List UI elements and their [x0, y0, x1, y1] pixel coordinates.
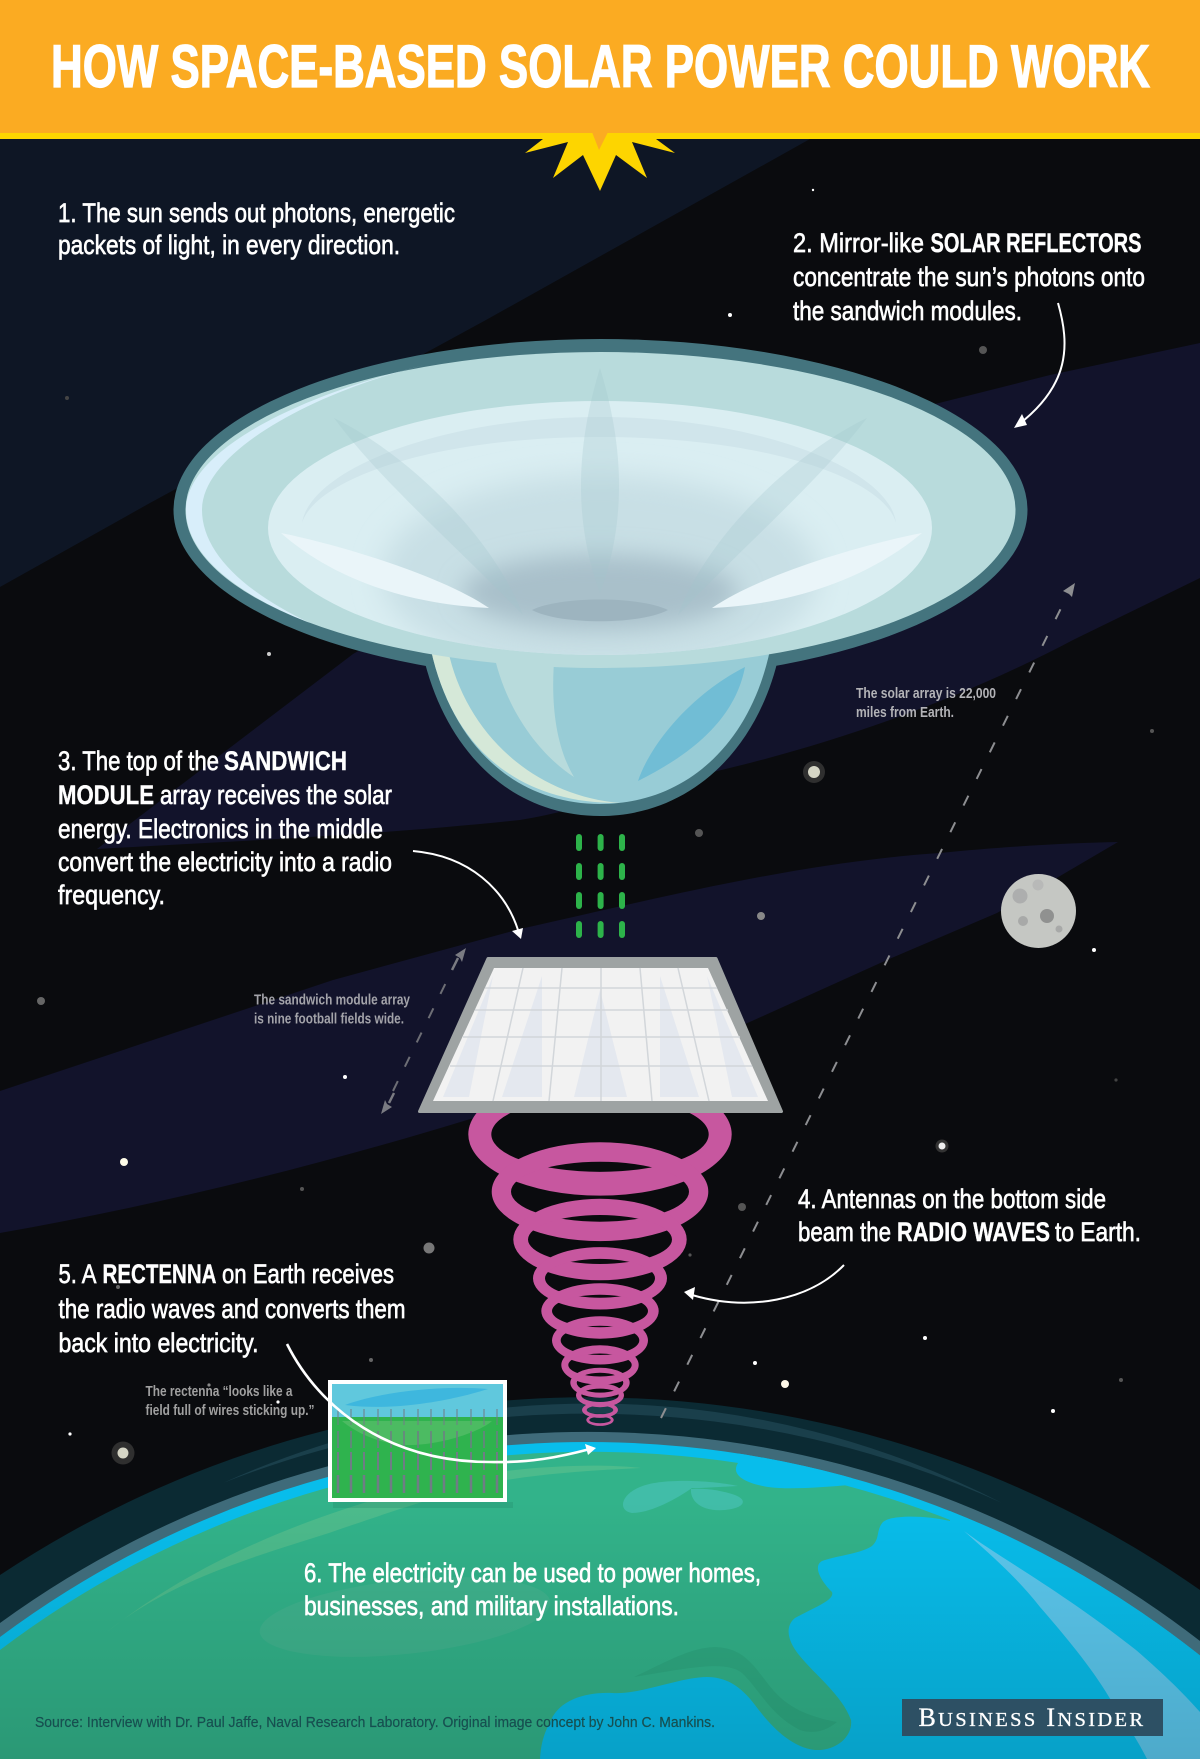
ocean: main body: [540, 1500, 1200, 1759]
land decal: long light streak: [107, 1466, 641, 1632]
step 5 text: on Earth receives: [222, 1259, 394, 1289]
sun: [525, 139, 675, 191]
step 5 text: the radio waves and converts them: [58, 1294, 406, 1324]
land: [0, 1452, 1200, 1759]
atmosphere highlight band: [223, 1403, 1002, 1503]
land decal: dark ridge: [634, 1647, 837, 1732]
ocean: light streak: [964, 1531, 1200, 1759]
rectenna shadow: [333, 1502, 513, 1508]
land decal: flower shape: [623, 1481, 743, 1513]
step 1 text: [58, 198, 455, 260]
note: sandwich module width: is nine football fields wide.: [254, 1010, 404, 1028]
step 5 text: back into electricity.: [58, 1328, 258, 1358]
step 5 text: RECTENNA: [102, 1259, 216, 1289]
dish rim: [174, 339, 1028, 681]
step 3 text: energy. Electronics in the middle: [58, 814, 383, 844]
module frame: [420, 958, 782, 1112]
step 4 text: [798, 1184, 1141, 1247]
step 3 text: SANDWICH: [224, 746, 347, 776]
orange banner: [0, 0, 1200, 133]
step 3 text: convert the electricity into a radio: [58, 847, 392, 877]
step 3 text: [58, 746, 392, 910]
rectenna inset: [328, 1380, 513, 1508]
land decal: soft blob: [256, 1565, 554, 1669]
dashed width arrow: nine football fields: [381, 948, 466, 1114]
note: solar array distance: [856, 685, 996, 721]
step 5 text: 5. A: [58, 1259, 96, 1289]
arrow: step 5: [287, 1344, 596, 1462]
dish light petals: [281, 533, 922, 608]
step 4 text: RADIO WAVES: [897, 1217, 1050, 1247]
sun notch: [592, 132, 608, 150]
step 2 text: [793, 228, 1145, 326]
background band: middle diagonal: [97, 343, 1200, 849]
step 3 text: frequency.: [58, 880, 165, 910]
source line: Source: Interview with Dr. Paul Jaffe, Naval Research Laboratory. Original image concept by John C. Mankins.: [35, 1714, 715, 1731]
arrow: step 4: [684, 1265, 844, 1303]
dish inner surface: [268, 401, 932, 655]
bulb blue fold: [638, 667, 745, 781]
module grid: [450, 968, 752, 1101]
Business Insider logo: BUSINESS INSIDER: [918, 1703, 1143, 1732]
rectenna sky: [332, 1384, 503, 1417]
step 5 text: [58, 1259, 406, 1358]
step 6 text: businesses, and military installations.: [304, 1591, 679, 1621]
background band: upper-left: [0, 139, 810, 587]
arrow: step 3: [413, 851, 523, 939]
microwave photon dashes: [576, 834, 625, 938]
dashed distance arrow: 22,000 miles: [661, 583, 1075, 1418]
rectenna field highlight: [342, 1421, 492, 1445]
note: rectenna quote: [146, 1383, 314, 1419]
note: solar array distance: miles from Earth.: [856, 704, 954, 721]
dish arc crescent: [302, 417, 896, 523]
rectenna wires: [338, 1409, 497, 1493]
atmosphere: [0, 1397, 1200, 1759]
module surface: [433, 968, 768, 1101]
moon: [1001, 874, 1076, 948]
stars: [37, 189, 1154, 1464]
solar reflector dish: [174, 339, 1028, 816]
note: solar array distance: The solar array is 22,000: [856, 685, 996, 702]
bulb interior: [431, 650, 770, 804]
earth bottom shading: [0, 1562, 1200, 1759]
dish interior: [186, 352, 1016, 668]
step 3 text: MODULE: [58, 780, 154, 810]
ocean ring: [0, 1442, 1200, 1759]
dish dark petals: [334, 368, 867, 615]
note: sandwich module width: [254, 992, 411, 1028]
dish centre aperture: [532, 600, 668, 621]
dish left highlight: [186, 365, 425, 623]
step 3 text: array receives the solar: [160, 780, 392, 810]
note: rectenna quote: The rectenna “looks like a: [146, 1383, 293, 1400]
step 1 text: 1. The sun sends out photons, energetic: [58, 198, 455, 228]
step 2 text: 2. Mirror-like: [793, 228, 924, 258]
step 6 text: 6. The electricity can be used to power homes,: [304, 1558, 761, 1588]
rectenna cloud: [345, 1388, 488, 1407]
step 6 text: [304, 1558, 761, 1621]
Business Insider logo: [902, 1699, 1163, 1736]
steel atmosphere ring: [0, 1432, 1200, 1759]
earth: [0, 1397, 1200, 1759]
bulb light fold: [493, 650, 574, 777]
ocean: northern bay: [736, 1454, 852, 1488]
yellow rule: [0, 133, 1200, 139]
module blue facets: [443, 976, 758, 1097]
step 4 text: 4. Antennas on the bottom side: [798, 1184, 1106, 1214]
background band: lower diagonal: [0, 842, 1118, 1233]
header banner: [0, 0, 1200, 191]
note: sandwich module width: The sandwich module array: [254, 992, 411, 1008]
sandwich module array: [420, 958, 782, 1112]
step 4 text: beam the: [798, 1217, 891, 1247]
step 1 text: packets of light, in every direction.: [58, 230, 400, 260]
bulb pale highlight: [431, 650, 620, 803]
rectenna field: [332, 1417, 503, 1498]
rectenna frame: [328, 1380, 507, 1502]
bulb rim: [423, 655, 779, 816]
step 4 text: to Earth.: [1055, 1217, 1141, 1247]
step 2 text: the sandwich modules.: [793, 296, 1022, 326]
dish depth shading: [384, 474, 816, 655]
step 3 text: 3. The top of the: [58, 746, 219, 776]
arrow: step 2: [1014, 303, 1065, 428]
note: rectenna quote: field full of wires sticking up.”: [146, 1402, 314, 1419]
radio wave coils: [468, 1073, 732, 1426]
